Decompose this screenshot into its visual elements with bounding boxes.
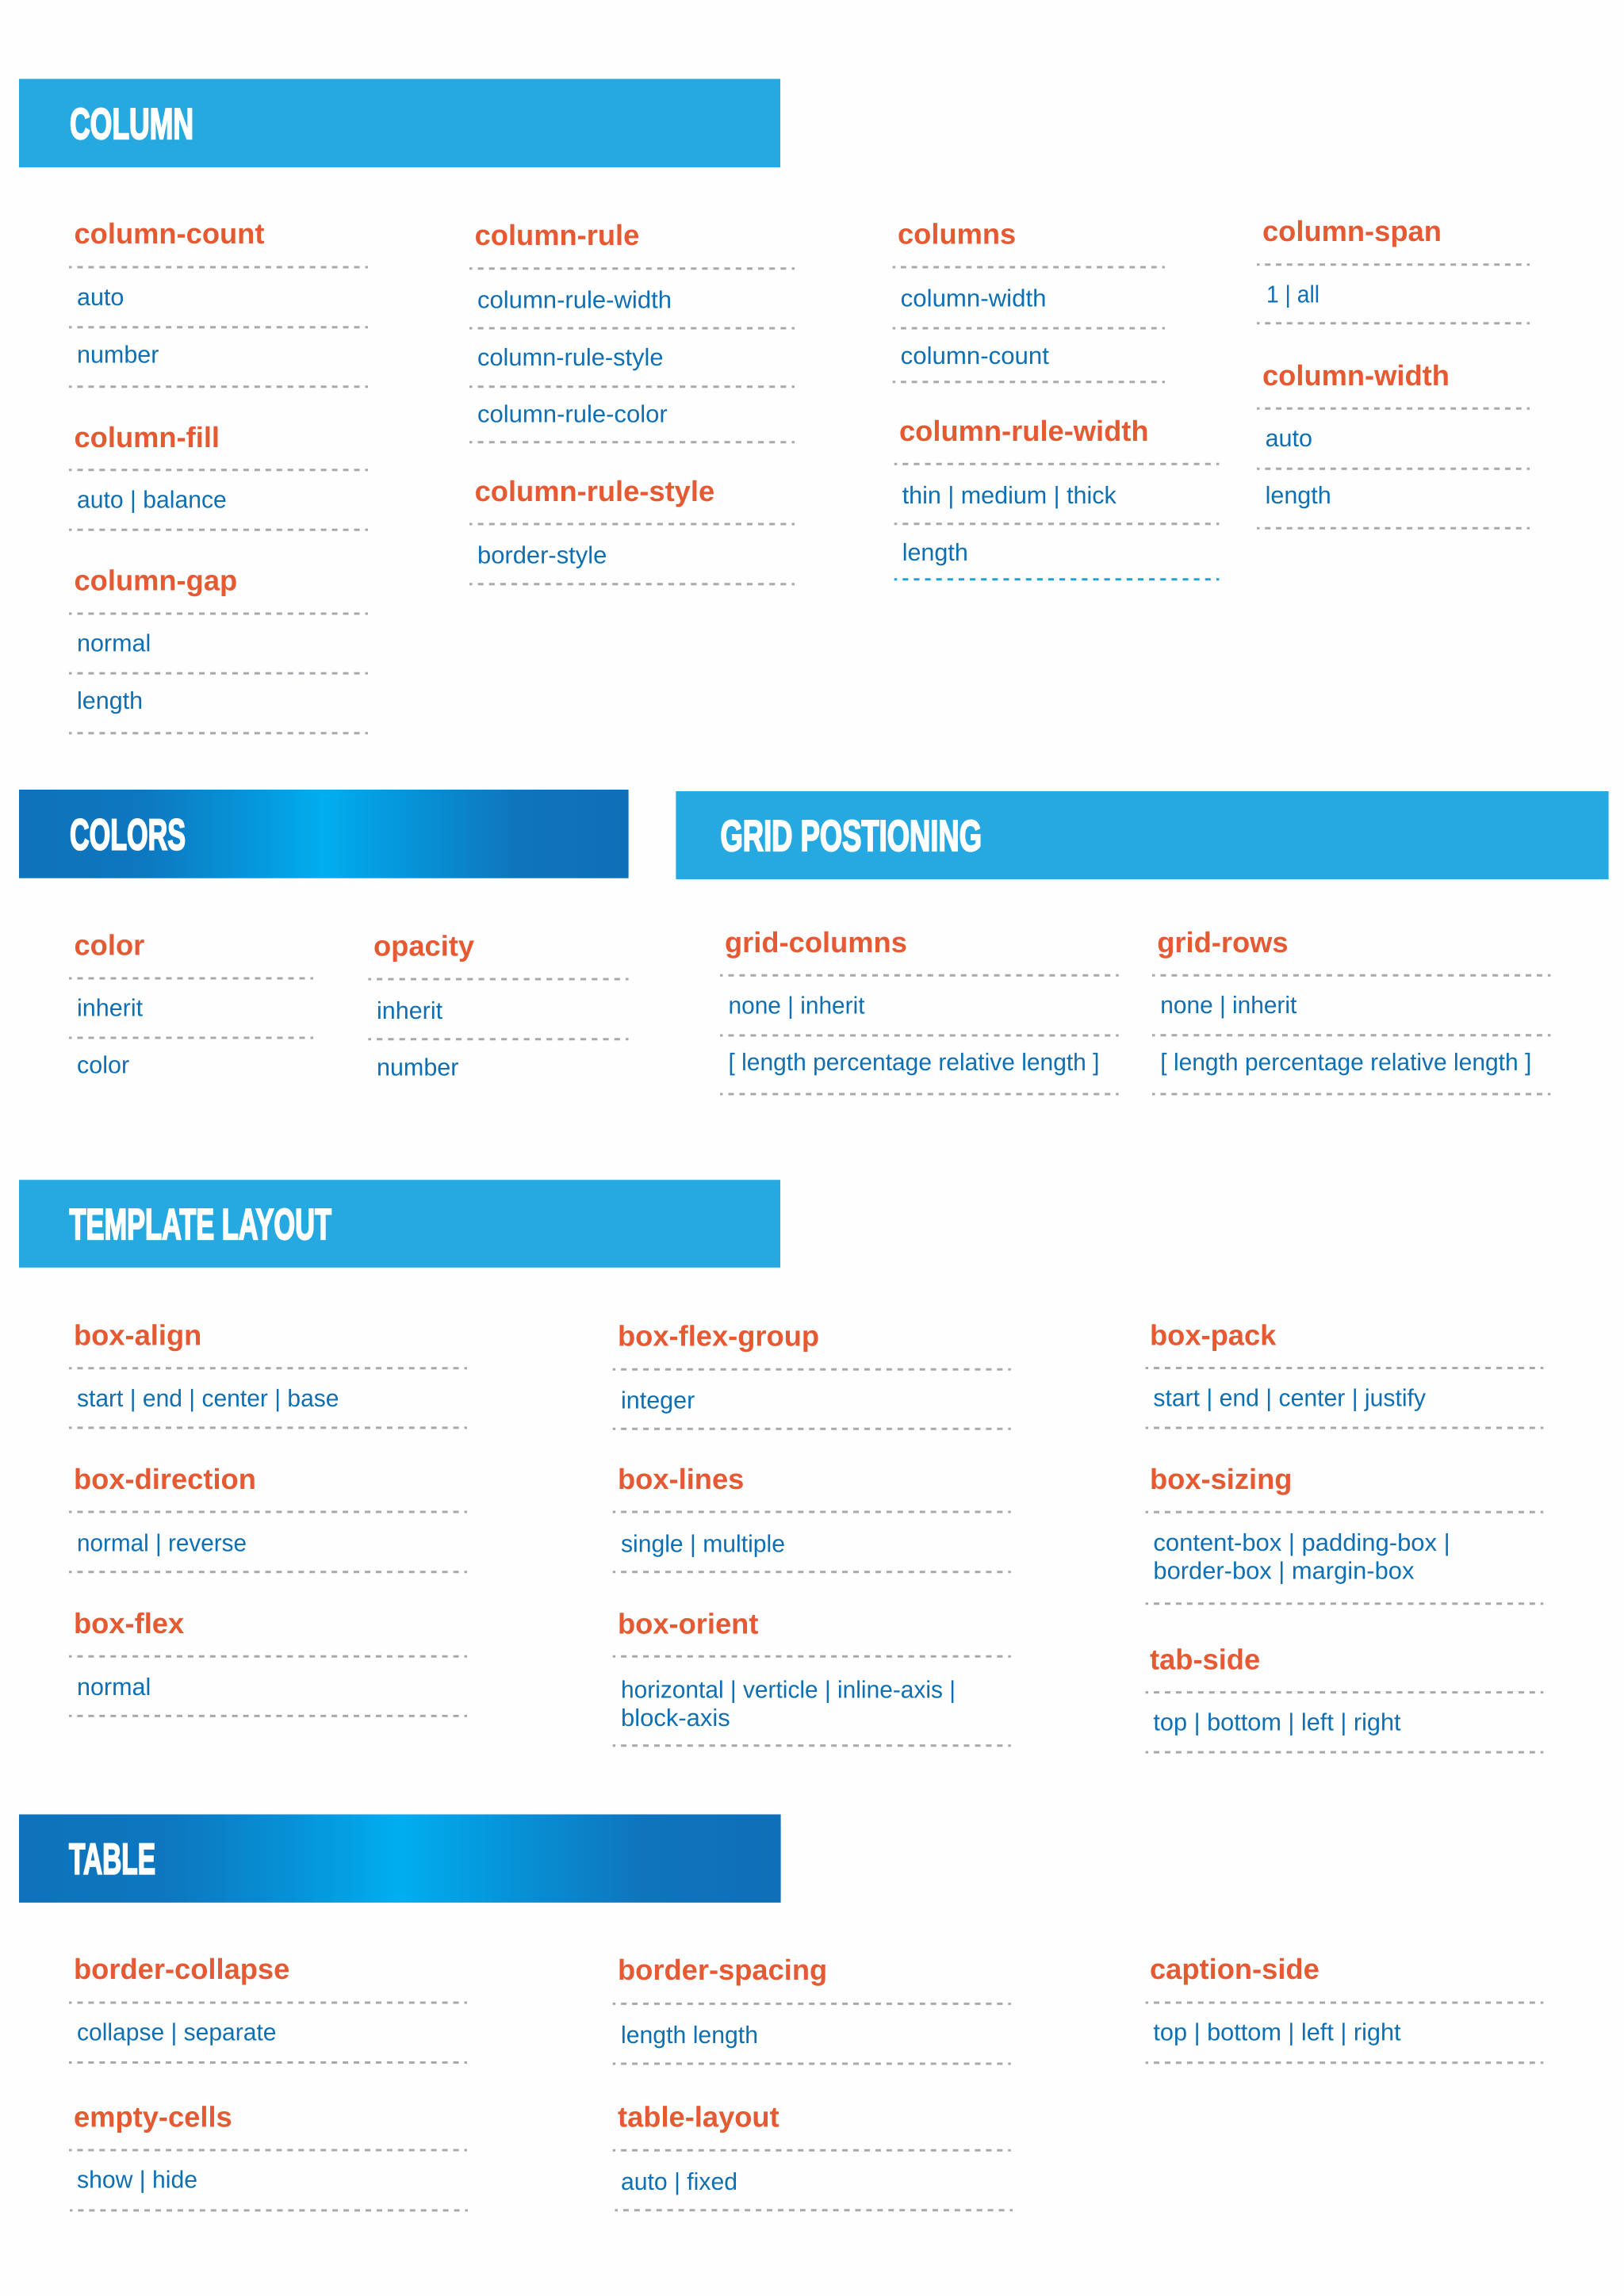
property: caption-side <box>1146 1953 1543 2063</box>
property: box-lines: single | multiple <box>621 1530 785 1557</box>
property: empty-cells: show | hide <box>77 2166 197 2193</box>
property: box-flex-group <box>613 1320 1011 1429</box>
property: column-count: column-count <box>75 217 264 250</box>
property: column-width: column-width <box>1262 359 1450 392</box>
property: color: color <box>77 1051 129 1078</box>
property: box-flex: normal <box>77 1674 151 1701</box>
property: tab-side: tab-side <box>1150 1643 1260 1676</box>
property: column-count <box>69 217 368 387</box>
property: border-spacing: border-spacing <box>618 1954 827 1986</box>
property: box-flex-group: box-flex-group <box>618 1320 819 1353</box>
property: border-collapse <box>69 1953 467 2063</box>
property: column-span: column-span <box>1262 215 1442 247</box>
property: column-gap: column-gap <box>75 564 237 596</box>
property: column-rule <box>469 219 795 442</box>
property: column-width: length <box>1266 482 1331 509</box>
property: color <box>69 928 313 1078</box>
property: box-orient <box>613 1608 1011 1746</box>
property: box-align: start | end | center | base <box>77 1385 339 1412</box>
property: border-spacing <box>613 1954 1011 2064</box>
property: opacity: number <box>377 1054 458 1081</box>
property: border-collapse: collapse | separate <box>77 2019 276 2046</box>
property: tab-side: top | bottom | left | right <box>1153 1709 1401 1736</box>
property: column-rule: column-rule-style <box>477 344 663 371</box>
property: column-rule-width: thin | medium | thick <box>902 482 1117 509</box>
property: empty-cells <box>69 2100 468 2210</box>
property: column-fill: column-fill <box>75 421 220 453</box>
property: grid-rows: grid-rows <box>1157 926 1289 959</box>
property: grid-rows: [ length percentage relative length ] <box>1160 1049 1531 1076</box>
property: table-layout <box>613 2101 1013 2210</box>
property: grid-columns: grid-columns <box>725 926 907 959</box>
property: column-width: auto <box>1266 425 1312 452</box>
property: column-rule-style <box>469 475 795 584</box>
property: column-rule-width: column-rule-width <box>899 415 1149 447</box>
property: column-gap: normal <box>77 630 151 657</box>
property: grid-columns: none | inherit <box>728 992 865 1019</box>
property: opacity: opacity <box>373 930 474 962</box>
property: box-direction <box>69 1463 467 1572</box>
property: box-orient: block-axis <box>621 1705 730 1732</box>
property: box-direction: normal | reverse <box>77 1530 247 1557</box>
property: column-span: 1 | all <box>1266 281 1320 308</box>
property: table-layout: table-layout <box>618 2101 779 2133</box>
property: columns: columns <box>898 218 1016 251</box>
banner: COLORS: COLORS <box>70 810 186 859</box>
property: box-sizing <box>1146 1463 1543 1604</box>
property: box-direction: box-direction <box>74 1463 256 1495</box>
property: box-orient: horizontal | verticle | inline-axis | <box>621 1677 956 1704</box>
property: box-flex <box>69 1607 467 1716</box>
property: column-count: number <box>77 341 159 368</box>
panel: column <box>19 79 1530 733</box>
banner: TEMPLATE LAYOUT <box>19 1180 780 1268</box>
property: column-count: auto <box>77 284 124 311</box>
property: grid-rows: none | inherit <box>1160 992 1297 1019</box>
panel: colors <box>19 790 629 1081</box>
property: box-align: box-align <box>74 1319 201 1352</box>
property: box-sizing: border-box | margin-box <box>1153 1557 1414 1584</box>
property: box-orient: box-orient <box>618 1608 758 1640</box>
banner: GRID POSTIONING: GRID POSTIONING <box>720 811 982 860</box>
property: caption-side: top | bottom | left | right <box>1153 2019 1401 2045</box>
property: box-sizing: content-box | padding-box | <box>1153 1529 1450 1556</box>
property: column-rule-width: length <box>902 539 968 566</box>
panel: table <box>19 1814 1543 2210</box>
banner: COLUMN: COLUMN <box>70 99 193 148</box>
property: box-pack <box>1146 1318 1543 1428</box>
property: border-spacing: length length <box>621 2022 758 2049</box>
property: column-rule: column-rule-width <box>477 287 672 314</box>
property: columns <box>893 218 1165 382</box>
panel: grid positioning <box>676 791 1609 1094</box>
property: tab-side <box>1146 1643 1543 1752</box>
property: columns: column-count <box>901 342 1049 369</box>
property: box-pack: box-pack <box>1150 1318 1277 1351</box>
property: columns: column-width <box>901 285 1047 312</box>
property: column-gap: length <box>77 687 143 714</box>
property: column-span <box>1257 215 1530 323</box>
banner: COLORS <box>19 790 629 878</box>
property: opacity: inherit <box>377 997 443 1024</box>
property: column-fill: auto | balance <box>77 487 227 514</box>
property: table-layout: auto | fixed <box>621 2168 737 2195</box>
property: caption-side: caption-side <box>1150 1953 1320 1985</box>
property: empty-cells: empty-cells <box>74 2100 232 2133</box>
property: box-lines: box-lines <box>618 1463 744 1495</box>
property: column-rule-style: border-style <box>477 542 607 569</box>
banner: TABLE: TABLE <box>69 1835 155 1884</box>
panel: template layout <box>19 1180 1543 1752</box>
property: column-rule-style: column-rule-style <box>475 475 714 507</box>
property: opacity <box>368 930 629 1081</box>
property: grid-columns <box>720 926 1119 1094</box>
property: column-rule: column-rule <box>475 219 639 251</box>
property: border-collapse: border-collapse <box>74 1953 289 1985</box>
property: column-rule-width <box>894 415 1219 580</box>
property: column-fill <box>69 421 368 530</box>
property: box-pack: start | end | center | justify <box>1153 1384 1427 1411</box>
property: grid-rows <box>1152 926 1550 1094</box>
property: box-sizing: box-sizing <box>1150 1463 1292 1495</box>
property: box-flex-group: integer <box>621 1387 695 1414</box>
banner: GRID POSTIONING <box>676 791 1609 879</box>
property: column-gap <box>69 564 368 733</box>
banner: TEMPLATE LAYOUT: TEMPLATE LAYOUT <box>70 1200 331 1249</box>
banner: TABLE <box>19 1814 781 1903</box>
property: box-flex: box-flex <box>74 1607 184 1640</box>
property: color: color <box>75 928 144 961</box>
property: grid-columns: [ length percentage relative length ] <box>728 1049 1099 1076</box>
property: box-lines <box>613 1463 1011 1572</box>
property: box-align <box>69 1319 467 1428</box>
property: column-width <box>1257 359 1530 528</box>
property: color: inherit <box>77 995 144 1022</box>
property: column-rule: column-rule-color <box>477 401 668 428</box>
banner: COLUMN <box>19 79 780 167</box>
